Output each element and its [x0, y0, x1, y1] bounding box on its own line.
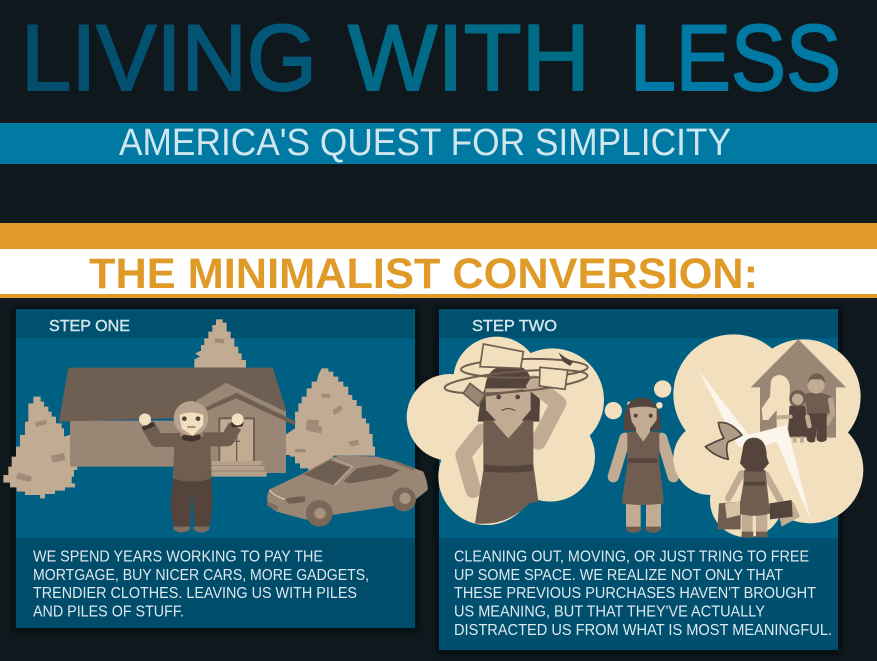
house roof [59, 368, 287, 422]
section heading band [0, 223, 877, 298]
panel: step one [3, 309, 428, 631]
dress [475, 421, 538, 524]
face and neck [485, 388, 531, 438]
steps [208, 461, 267, 477]
step one text band: MORTGAGE, BUY NICER CARS, MORE GADGETS, [33, 567, 369, 584]
legs [171, 478, 212, 527]
step two text band: US MEANING, BUT THAT THEY'VE ACTUALLY [454, 604, 765, 620]
step two text band: UP SOME SPACE. WE REALIZE NOT ONLY THAT [454, 567, 783, 584]
title: LESS [630, 5, 841, 110]
step two text band: DISTRACTED US FROM WHAT IS MOST MEANINGFUL. [454, 622, 832, 639]
tree marks [16, 338, 359, 482]
house walls [70, 383, 286, 473]
father [805, 392, 832, 415]
step one text band: TRENDIER CLOTHES. LEAVING US WITH PILES [33, 585, 357, 602]
hair [478, 377, 540, 422]
tree right [285, 368, 375, 472]
door [218, 417, 255, 462]
stressed woman [444, 344, 588, 524]
title: LIVING [21, 5, 317, 110]
tree left [3, 397, 77, 498]
silhouette figure [762, 375, 793, 433]
step one text band [16, 538, 415, 628]
step one text band: AND PILES OF STUFF. [33, 604, 184, 620]
arms [148, 426, 235, 440]
step two text band: CLEANING OUT, MOVING, OR JUST TRING TO FREE [454, 548, 809, 566]
step one text band: WE SPEND YEARS WORKING TO PAY THE [33, 548, 323, 566]
cuffs [141, 421, 244, 431]
orbit lines [444, 358, 588, 398]
step one label: STEP ONE [49, 318, 130, 335]
title: WITH [348, 5, 590, 110]
step two text band [439, 538, 838, 650]
head [174, 401, 208, 436]
right thought bubble [673, 334, 863, 537]
family in house [698, 339, 846, 520]
small thought dots [605, 380, 671, 419]
gable ridge [206, 393, 296, 425]
woman from behind with bags [717, 438, 800, 537]
illustration: house, trees, man, car [3, 319, 428, 532]
light rays [698, 370, 811, 520]
torso [173, 437, 212, 482]
step two label: STEP TWO [472, 318, 557, 335]
tree top [194, 319, 246, 368]
illustration: woman and thought bubbles [407, 334, 863, 537]
woman centre [613, 397, 673, 533]
child [788, 406, 809, 437]
car [267, 456, 428, 527]
subtitle banner: AMERICA'S QUEST FOR SIMPLICITY [119, 122, 731, 164]
section heading band: THE MINIMALIST CONVERSION: [89, 250, 758, 298]
left thought bubble [407, 337, 604, 525]
step two text band: THESE PREVIOUS PURCHASES HAVEN'T BROUGHT [454, 585, 816, 602]
gadgets [480, 344, 523, 368]
panel: step two [407, 309, 863, 653]
hourglass [705, 422, 742, 459]
hands [139, 413, 151, 425]
man [139, 401, 244, 532]
hair top [485, 365, 531, 388]
arms [463, 432, 482, 490]
title [21, 5, 841, 110]
